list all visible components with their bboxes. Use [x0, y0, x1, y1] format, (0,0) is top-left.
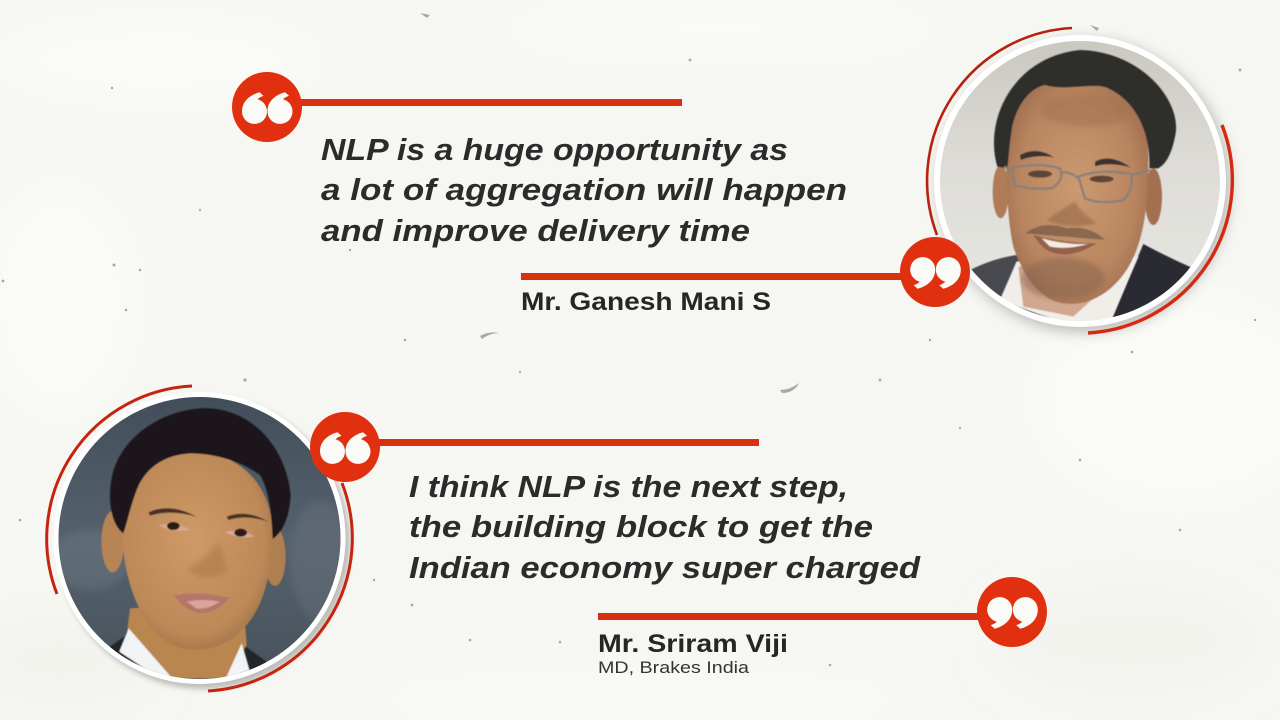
- speaker name: Mr. Ganesh Mani S: [521, 288, 771, 316]
- quote text: I think NLP is the next step,: [409, 469, 848, 504]
- glasses: [1004, 165, 1150, 202]
- suit: [110, 636, 144, 668]
- shirt: [1000, 257, 1138, 327]
- face: [122, 452, 272, 650]
- smile: [1033, 235, 1097, 254]
- quote text: and improve delivery time: [321, 213, 750, 248]
- face: [1006, 73, 1148, 304]
- red arcs around portrait one: [927, 28, 1232, 333]
- speaker role: MD, Brakes India: [598, 658, 750, 677]
- quote block two: [310, 412, 1047, 677]
- quote text: the building block to get the: [409, 509, 873, 544]
- rule and closing mark: [521, 237, 970, 307]
- hair: [110, 408, 291, 539]
- neck: [127, 602, 247, 678]
- portrait: Mr. Sriram Viji: [50, 390, 350, 690]
- ears: [101, 511, 124, 572]
- nose: [190, 544, 226, 578]
- rule and opening mark: [310, 412, 759, 482]
- eyes: [158, 524, 191, 531]
- brows: [148, 508, 197, 517]
- nose and mustache: [1047, 202, 1097, 226]
- collar: [118, 628, 172, 676]
- ears: [993, 165, 1009, 218]
- jacket: [971, 254, 1051, 318]
- speaker name: Mr. Sriram Viji: [598, 630, 788, 658]
- rule and closing mark: [598, 577, 1047, 647]
- brows: [1020, 151, 1054, 160]
- quote text: a lot of aggregation will happen: [321, 172, 847, 207]
- portrait: Mr. Ganesh Mani S: [930, 30, 1230, 340]
- quote text: [321, 132, 847, 248]
- quote block one: [232, 72, 970, 316]
- quote text: [409, 469, 921, 585]
- lips: [174, 593, 230, 613]
- hair: [994, 50, 1176, 168]
- red arcs around portrait two: [47, 386, 352, 691]
- rule and opening mark: [232, 72, 682, 142]
- quote text: NLP is a huge opportunity as: [321, 132, 788, 167]
- quote text: Indian economy super charged: [409, 550, 921, 585]
- eyes: [1028, 170, 1052, 178]
